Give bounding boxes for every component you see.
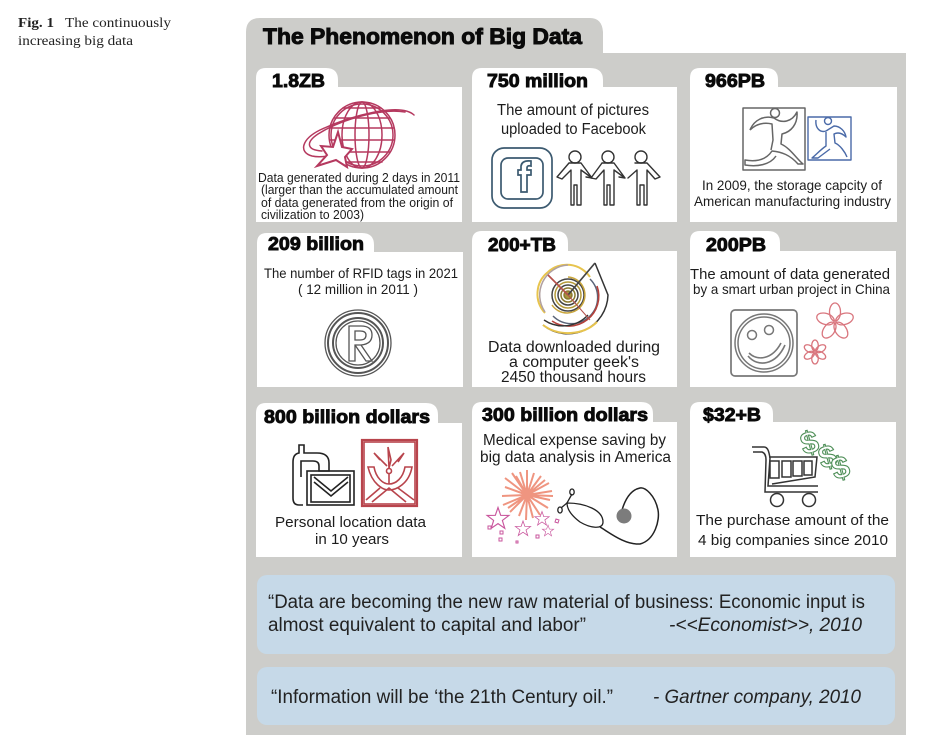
panel: 200PB [690,231,896,387]
panel: 750 million [472,68,677,222]
icon: concentric target [537,263,608,334]
title: The Phenomenon of Big Data [263,24,582,49]
description [694,177,891,209]
icon: globe with orbit and star [304,102,414,168]
description: a computer geek's [509,354,639,371]
callout: Economist quote: “Data are becoming the new raw material of business: Economic input is [268,592,865,613]
description: The amount of data generated [690,266,890,283]
description: Medical expense saving by [483,432,666,449]
panel: $32+B [690,402,896,557]
icon: smiley face [731,310,797,376]
figure caption: The continuously [65,16,171,31]
icon: flowers [803,303,855,364]
callout: Gartner quote: - Gartner company, 2010 [653,687,861,708]
panel: 966PB [690,68,897,222]
description: 2450 thousand hours [501,369,646,386]
description: by a smart urban project in China [693,281,890,297]
description: The amount of pictures [497,102,649,119]
description: Data generated during 2 days in 2011 [258,171,460,185]
callout: Economist quote: -<<Economist>>, 2010 [669,615,862,636]
callout: Gartner quote [257,667,895,725]
figure caption: increasing big data [18,34,134,49]
icon: phone and envelope [293,445,354,505]
description: uploaded to Facebook [501,121,646,138]
icon: stethoscope [558,488,658,544]
panel: 200+TB: 200+TB [488,234,556,255]
description: Data downloaded during [488,339,660,356]
panel: 1.8ZB: 1.8ZB [272,70,325,91]
description [488,339,660,386]
icon: green dollar signs: $ [797,423,822,462]
description [480,432,671,466]
panel: 800 billion dollars: 800 billion dollars [264,406,430,427]
description: civilization to 2003) [261,208,364,222]
icon: green dollar signs: $ [828,448,853,487]
panel: 966PB: 966PB [705,70,765,91]
description: in 10 years [315,531,389,548]
description: American manufacturing industry [694,193,891,209]
description: ( 12 million in 2011 ) [298,281,418,297]
description: The number of RFID tags in 2021 [264,265,458,281]
figure caption [18,16,171,49]
icon: green dollar signs [797,423,853,487]
description [690,266,890,297]
description [258,171,460,222]
description: In 2009, the storage capcity of [702,177,882,193]
description [264,265,458,297]
icon: three people holding hands [557,151,660,205]
panel: 750 million: 750 million [487,70,588,91]
icon: red stamp [362,440,417,506]
icon: green dollar signs: $ [815,437,840,476]
description [696,512,889,549]
description: 4 big companies since 2010 [698,532,888,549]
panel: 209 billion: 209 billion [268,233,364,254]
description: big data analysis in America [480,449,671,466]
infographic background panel [246,18,906,735]
panel: 200+TB [472,231,677,387]
panel: $32+B: $32+B [703,404,761,425]
icon: shopping cart [752,447,818,506]
panel: 300 billion dollars [472,402,677,557]
description: (larger than the accumulated amount [261,183,458,197]
description: Personal location data [275,514,427,531]
panel: 1.8ZB [256,68,462,222]
description: The purchase amount of the [696,512,889,529]
icon: registered trademark [325,310,391,376]
callout: Gartner quote: “Information will be ‘the 21th Century oil.” [271,687,613,708]
callout: Economist quote: almost equivalent to capital and labor” [268,615,586,636]
icon: Facebook logo [492,148,552,208]
description [497,102,649,138]
icon: fireworks [487,470,559,543]
icon: running figures [743,108,851,170]
description [275,514,427,548]
figure caption: Fig. 1 [18,16,54,31]
description: of data generated from the origin of [261,196,454,210]
panel: 300 billion dollars: 300 billion dollars [482,404,648,425]
panel: 200PB: 200PB [706,234,766,255]
panel: 800 billion dollars [256,403,462,557]
callout: Economist quote [257,575,895,654]
panel: 209 billion [257,233,463,387]
